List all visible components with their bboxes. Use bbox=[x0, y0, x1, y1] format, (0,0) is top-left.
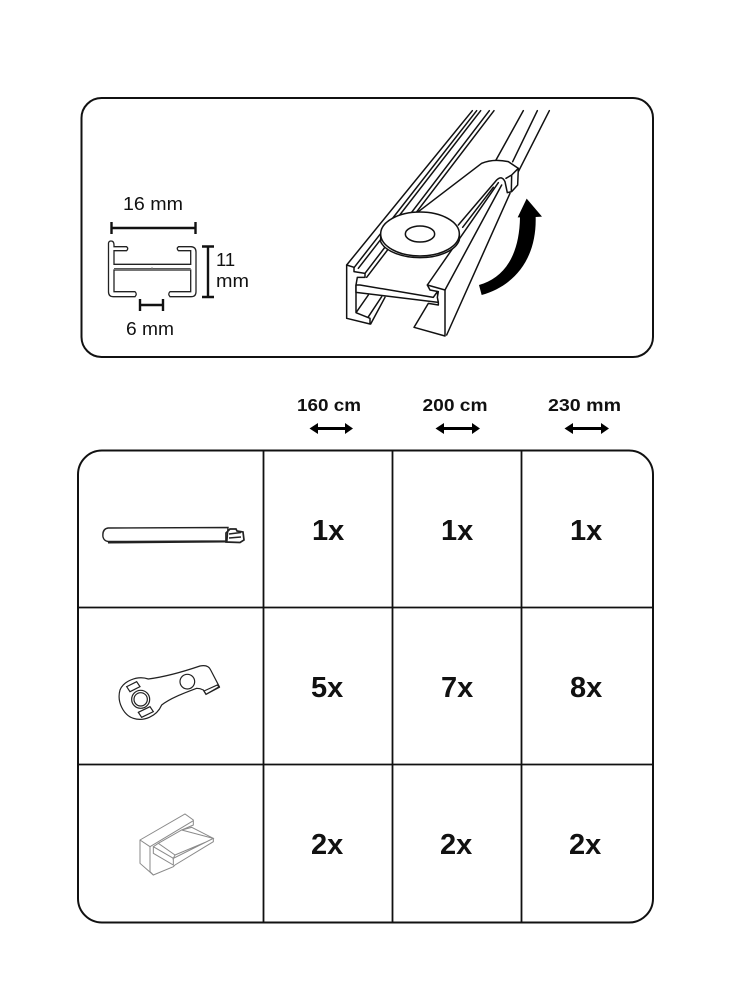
quantities row 3: 2x bbox=[440, 829, 472, 861]
dimension: 6 mm opening bbox=[126, 299, 174, 339]
rail front profile bbox=[347, 265, 445, 336]
illustration: rail with glider being rotated in bbox=[347, 111, 549, 336]
quantities row 2: 7x bbox=[441, 672, 473, 704]
quantities row 2 bbox=[311, 672, 602, 704]
dimension: 11 mm height: mm bbox=[216, 270, 249, 291]
quantities row 1: 1x bbox=[570, 515, 602, 547]
row 1: rail piece bbox=[103, 515, 602, 547]
header: 230 mm: 230 mm bbox=[548, 395, 621, 415]
icon: end stop bbox=[140, 814, 213, 875]
quantities row 3 bbox=[311, 829, 601, 861]
rail cross-section profile bbox=[108, 241, 196, 297]
column headers bbox=[297, 395, 621, 434]
dimension: 11 mm height: 11 bbox=[216, 249, 235, 270]
row 3: end stop bbox=[140, 814, 601, 875]
dimension: 6 mm opening: 6 mm bbox=[126, 318, 174, 339]
glider arm bbox=[418, 160, 518, 225]
dimension: 11 mm height bbox=[202, 246, 249, 297]
header: 160 cm: 160 cm bbox=[297, 395, 361, 415]
header: 200 cm: 200 cm bbox=[422, 395, 488, 415]
table: quantities per rail length bbox=[78, 450, 653, 922]
quantities row 2: 5x bbox=[311, 672, 343, 704]
quantities row 1: 1x bbox=[441, 515, 473, 547]
quantities row 1: 1x bbox=[312, 515, 344, 547]
quantities row 2: 8x bbox=[570, 672, 602, 704]
header: 160 cm bbox=[297, 395, 361, 434]
header: 200 cm bbox=[422, 395, 488, 434]
quantities row 1 bbox=[312, 515, 602, 547]
icon: glider bbox=[119, 666, 219, 719]
curved arrow bbox=[479, 199, 542, 295]
glider disc bbox=[381, 212, 459, 258]
dimension: 16 mm width: 16 mm bbox=[123, 193, 183, 214]
dimension: 16 mm width bbox=[112, 193, 196, 234]
icon: rail section bbox=[103, 528, 244, 542]
header: 230 mm bbox=[548, 395, 621, 434]
quantities row 3: 2x bbox=[569, 829, 601, 861]
rail long edges bbox=[347, 111, 549, 335]
panel: rail dimensions and mounting bbox=[82, 98, 653, 357]
row 2: glider bbox=[119, 666, 602, 719]
quantities row 3: 2x bbox=[311, 829, 343, 861]
